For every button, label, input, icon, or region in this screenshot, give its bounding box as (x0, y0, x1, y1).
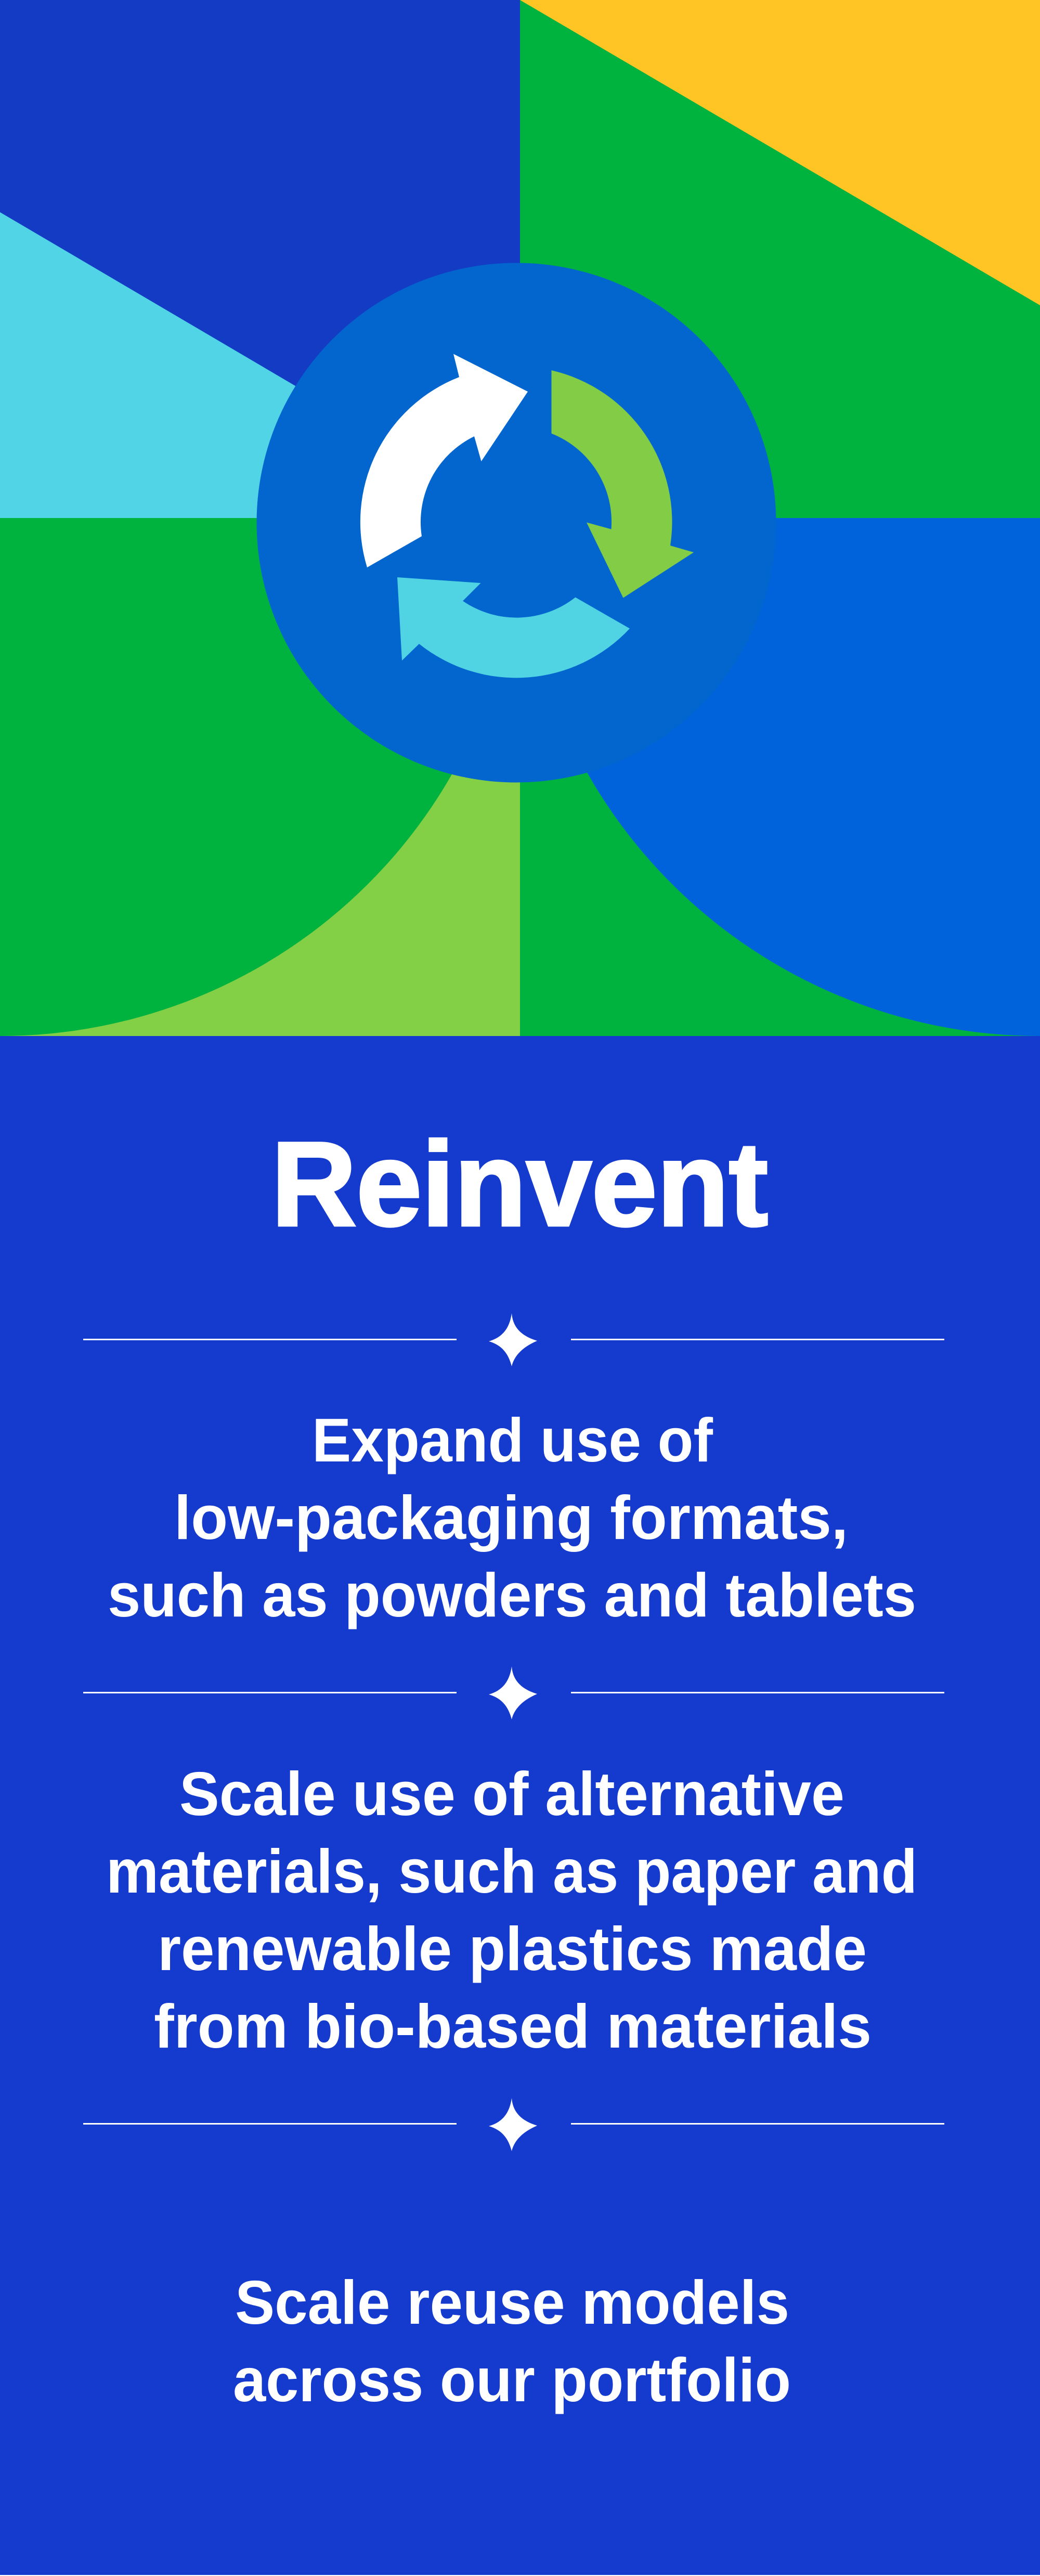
icon: sparkle (489, 1313, 537, 1366)
white arrow (360, 354, 528, 567)
icon: recycling arrows (360, 354, 694, 678)
bottom right green quadrant (520, 518, 1040, 1036)
divider 1 (83, 1313, 944, 1366)
text block: alternative materials: Scale use of alternative (179, 1759, 844, 1829)
text block: low-packaging formats: Expand use of (312, 1406, 713, 1475)
green quarter circle (0, 518, 520, 1036)
heading: Reinvent (271, 1117, 768, 1251)
top right green quadrant (520, 0, 1040, 518)
blue quarter circle (520, 518, 1040, 1036)
bottom left lime quadrant (0, 518, 520, 1036)
divider 3 (83, 2098, 944, 2151)
lime arrow (551, 370, 694, 598)
panel: geometric header artwork (0, 0, 1040, 1036)
divider 2 (83, 1666, 944, 1719)
cyan arrow (397, 577, 630, 678)
text block: reuse models: across our portfolio (233, 2346, 791, 2415)
text block: low-packaging formats: such as powders and tablets (108, 1561, 916, 1630)
text block: reuse models (233, 2268, 791, 2415)
icon: sparkle (489, 1666, 537, 1719)
central blue circle (257, 263, 776, 782)
text block: alternative materials (106, 1759, 917, 2061)
cyan triangle (0, 212, 520, 518)
icon: sparkle (489, 2098, 537, 2151)
text block: reuse models: Scale reuse models (235, 2268, 789, 2337)
text block: alternative materials: renewable plastics made (158, 1914, 867, 1984)
panel: text section (0, 1036, 1040, 2575)
text block: alternative materials: materials, such as paper and (106, 1837, 917, 1906)
yellow triangle (520, 0, 1040, 305)
text block: low-packaging formats: low-packaging formats, (174, 1483, 848, 1552)
text block: low-packaging formats (108, 1406, 916, 1630)
text block: alternative materials: from bio-based materials (154, 1992, 872, 2061)
